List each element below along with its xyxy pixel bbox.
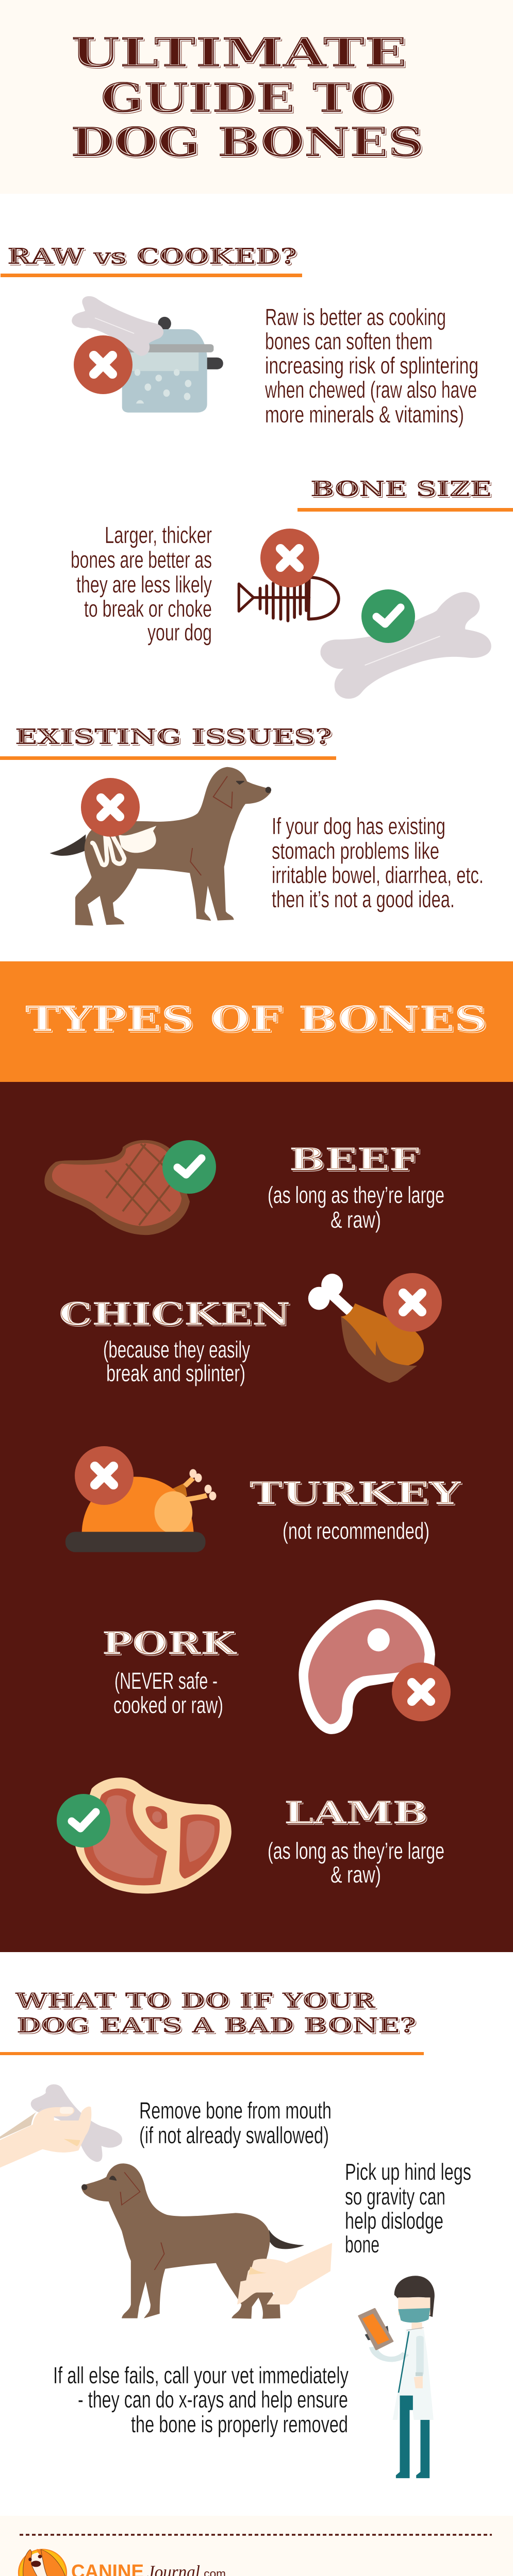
text: raw vs cooked: Raw is better as cooking: [265, 304, 446, 330]
icon: fish skeleton: [239, 578, 339, 621]
icon: red x badge: [383, 1273, 442, 1332]
title: DOG BONES: [71, 119, 424, 166]
title: [71, 29, 424, 166]
heading: pork: PORK: [102, 1625, 237, 1662]
icon: green check badge: [361, 589, 415, 643]
text: chicken: [103, 1336, 250, 1386]
text: beef: [268, 1182, 444, 1233]
text: beef: (as long as they’re large: [268, 1182, 444, 1208]
heading: lamb: LAMB: [284, 1795, 428, 1831]
heading: raw vs cooked: RAW vs COOKED?: [7, 244, 297, 269]
icon: green check badge: [57, 1794, 110, 1848]
heading: beef: BEEF: [289, 1142, 419, 1178]
row: beef: [44, 1140, 444, 1235]
panel: bone size: [71, 477, 513, 699]
heading: types of bones: TYPES OF BONES: [25, 998, 487, 1039]
text: pick up hind legs: help dislodge: [345, 2208, 443, 2234]
text: pick up hind legs: so gravity can: [345, 2183, 445, 2210]
text: call your vet: the bone is properly removed: [131, 2411, 348, 2437]
heading: bone size: BONE SIZE: [310, 477, 491, 501]
text: call your vet: [53, 2362, 349, 2437]
icon: roast turkey: [65, 1469, 216, 1552]
text: bone size: to break or choke: [84, 596, 212, 622]
icon: vet with phone: [359, 2276, 435, 2478]
icon: bone over cooking pot: [72, 296, 223, 413]
icon: steak: [44, 1140, 190, 1235]
text: lamb: [268, 1838, 444, 1888]
icon: pork chop: [299, 1600, 435, 1734]
icon: hand lifting hind legs: [237, 2243, 332, 2304]
heading: what to do: [15, 1989, 416, 2038]
text: call your vet: If all else fails, call your vet immediately: [53, 2362, 349, 2388]
panel: existing issues: [0, 724, 484, 926]
text: pork: (NEVER safe -: [114, 1668, 218, 1694]
text: bone size: Larger, thicker: [105, 522, 212, 548]
text: pork: [113, 1668, 223, 1718]
logo: canine journal dog: [19, 2549, 67, 2576]
text: lamb: & raw): [330, 1861, 381, 1888]
row: turkey: [65, 1446, 461, 1552]
icon: chicken leg: [308, 1274, 424, 1383]
heading: existing issues: EXISTING ISSUES?: [15, 724, 332, 749]
panel: types of bones: [0, 1082, 513, 1952]
heading: chicken: CHICKEN: [59, 1296, 290, 1332]
icon: red x badge: [81, 778, 140, 837]
text: raw vs cooked: [264, 304, 478, 428]
text: bone size: your dog: [147, 619, 212, 646]
logo: canine journal wordmark: [71, 2561, 226, 2576]
text: call your vet: - they can do x-rays and help ensure: [78, 2386, 348, 2413]
icon: large bone: [321, 592, 491, 699]
heading: what to do: WHAT TO DO IF YOUR: [15, 1989, 376, 2013]
text: remove bone: Remove bone from mouth: [139, 2097, 332, 2124]
text: pork: cooked or raw): [113, 1692, 223, 1718]
text: remove bone: (if not already swallowed): [139, 2122, 329, 2148]
icon: red x badge: [260, 529, 319, 587]
row: pork: [102, 1600, 451, 1734]
icon: red x badge: [75, 1446, 134, 1505]
icon: red x badge: [392, 1663, 451, 1721]
text: lamb: (as long as they’re large: [268, 1838, 444, 1864]
title: GUIDE TO: [101, 75, 394, 122]
text: raw vs cooked: bones can soften them: [265, 328, 433, 354]
title: ULTIMATE: [71, 29, 407, 76]
text: bone size: [71, 522, 212, 646]
text: chicken: break and splinter): [106, 1360, 245, 1386]
text: existing issues: stomach problems like: [272, 838, 439, 864]
icon: dog standing: [81, 2163, 304, 2319]
text: pick up hind legs: bone: [345, 2231, 379, 2258]
heading: turkey: TURKEY: [250, 1476, 461, 1512]
icon: dog with intestines: [49, 767, 271, 926]
text: bone size: bones are better as: [71, 547, 212, 573]
text: bone size: they are less likely: [76, 571, 212, 598]
icon: lamb chop: [75, 1777, 231, 1894]
text: remove bone: [139, 2097, 332, 2148]
text: existing issues: If your dog has existing: [272, 813, 445, 839]
text: pick up hind legs: [345, 2159, 471, 2258]
icon: green check badge: [162, 1140, 216, 1194]
panel: raw vs cooked: [1, 244, 478, 428]
text: turkey: (not recommended): [283, 1518, 429, 1544]
heading: what to do: DOG EATS A BAD BONE?: [16, 2013, 416, 2038]
icon: red x badge: [74, 335, 133, 394]
text: beef: & raw): [330, 1207, 381, 1233]
panel: footer: [0, 2516, 513, 2576]
panel: types of bones header: [0, 961, 513, 1082]
panel: what to do: [0, 1989, 471, 2478]
row: chicken: [59, 1273, 442, 1386]
panel: title: [0, 0, 513, 194]
text: chicken: (because they easily: [103, 1336, 250, 1363]
text: existing issues: [272, 813, 484, 912]
row: lamb: [57, 1777, 444, 1894]
icon: hand removing bone: [0, 2084, 122, 2167]
